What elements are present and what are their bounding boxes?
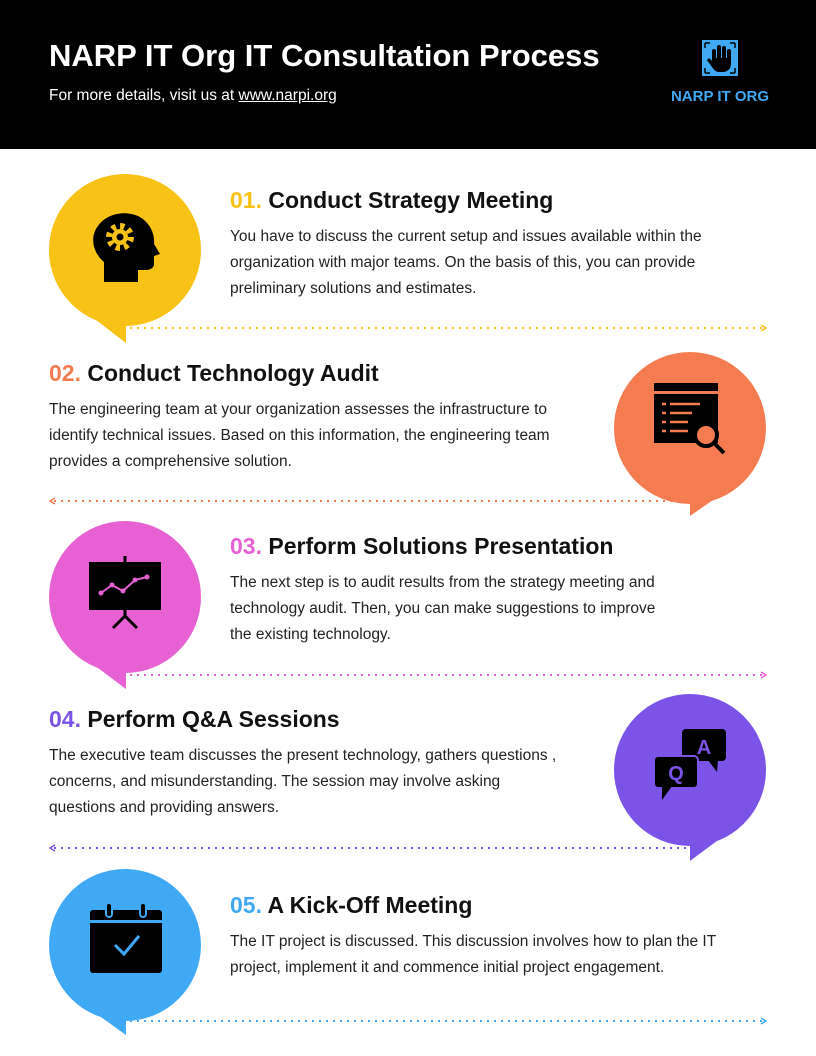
step 1 text: 01. Conduct Strategy Meeting <box>230 187 553 213</box>
step 3 text: 03. Perform Solutions Presentation <box>230 533 613 559</box>
step 4 text: The executive team discusses the present technology, gathers questions , concerns, and misunderstanding. The session may involve asking questions and providing answers. <box>49 747 556 816</box>
step 1 text <box>230 187 702 297</box>
step 4 text: 04. Perform Q&A Sessions <box>49 706 340 732</box>
step 2 text <box>49 360 550 470</box>
icon: calendar <box>90 903 162 973</box>
step 3 text <box>230 533 655 643</box>
bubble 4 <box>614 694 766 861</box>
step 5 text <box>230 892 716 976</box>
logo: NARP IT ORG <box>671 88 769 105</box>
title: NARP IT Org IT Consultation Process <box>49 38 600 73</box>
step 2 text: 02. Conduct Technology Audit <box>49 360 379 386</box>
header <box>0 0 816 149</box>
icon: Q&A chat: Q <box>668 763 684 785</box>
bubble 2 <box>614 352 766 516</box>
icon: presentation board <box>89 556 161 628</box>
step 5 text: 05. A Kick-Off Meeting <box>230 892 472 918</box>
bubble 3 <box>49 521 201 689</box>
icon: head gear <box>93 213 160 282</box>
step 3 text: The next step is to audit results from the strategy meeting and technology audit. Then, you can make suggestions to improve the existing technology. <box>230 574 655 643</box>
step 1 text: You have to discuss the current setup and issues available within the organization with major teams. On the basis of this, you can provide preliminary solutions and estimates. <box>230 228 702 297</box>
step 5 text: The IT project is discussed. This discussion involves how to plan the IT project, implement it and commence initial project engagement. <box>230 933 716 976</box>
subtitle: For more details, visit us at www.narpi.org <box>49 87 337 104</box>
step 2 text: The engineering team at your organization assesses the infrastructure to identify technical issues. Based on this information, the engineering team provides a comprehensive solution. <box>49 401 550 470</box>
step 4 text <box>49 706 556 816</box>
bubble 1 <box>49 174 201 343</box>
bubble 5 <box>49 869 201 1035</box>
icon: Q&A chat: A <box>697 737 711 759</box>
icon: audit document <box>654 383 724 453</box>
logo <box>671 40 769 105</box>
icon: Q&A chat <box>654 729 726 800</box>
